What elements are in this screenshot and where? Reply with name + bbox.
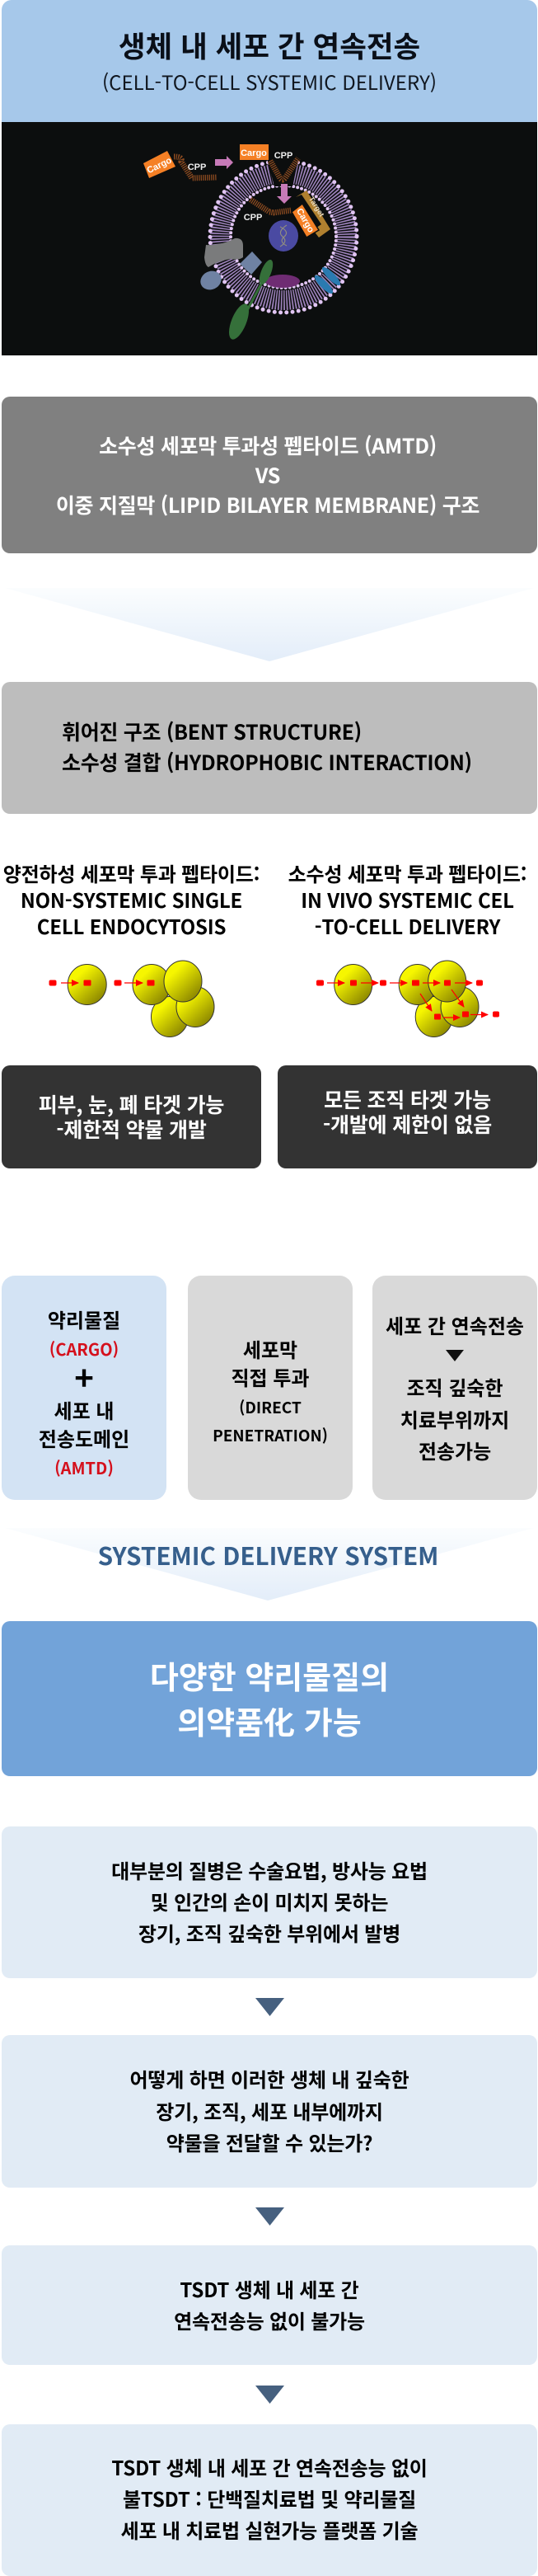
panel text <box>62 717 472 777</box>
title: 생체 내 세포 간 연속전송 <box>119 24 420 66</box>
box text <box>39 1089 224 1144</box>
card text: PENETRATION) <box>213 1424 328 1446</box>
icon: triangle down <box>446 1350 464 1361</box>
heading: right column: IN VIVO SYSTEMIC CEL <box>301 885 514 914</box>
box text <box>111 1855 428 1947</box>
heading: left column: 양전하성 세포막 투과 펩타이드: <box>3 858 260 887</box>
box text <box>111 2452 428 2544</box>
box text: 연속전송능 없이 불가능 <box>174 2306 365 2334</box>
card text: 세포 내 <box>54 1395 114 1424</box>
heading: right column <box>288 858 526 940</box>
panel text: VS <box>255 460 280 490</box>
box text: 장기, 조직, 세포 내부에까지 <box>156 2096 383 2124</box>
panel text: 의약품化 가능 <box>177 1698 362 1743</box>
panel text: 소수성 결합 (HYDROPHOBIC INTERACTION) <box>62 747 472 777</box>
card text <box>213 1334 328 1446</box>
panel: AMTD vs lipid bilayer <box>2 397 537 553</box>
target with cargo inside the cell <box>244 190 330 237</box>
box text: 약물을 전달할 수 있는가? <box>166 2127 372 2156</box>
box text: 장기, 조직 깊숙한 부위에서 발병 <box>138 1918 400 1947</box>
card text <box>39 1304 129 1479</box>
arrow: flow 1 <box>255 1998 284 2016</box>
panel text: 이중 지질막 (LIPID BILAYER MEMBRANE) 구조 <box>56 490 480 519</box>
card heading: 세포 간 연속전송 <box>386 1310 524 1339</box>
card text: 전송도메인 <box>39 1423 129 1452</box>
box text: 대부분의 질병은 수술요법, 방사능 요법 <box>111 1855 428 1884</box>
flow box 2 <box>2 2035 537 2188</box>
card: direct penetration <box>188 1276 353 1500</box>
box text: 세포 내 치료법 실현가능 플랫폼 기술 <box>121 2515 418 2544</box>
arrow: flow 3 <box>255 2386 284 2404</box>
box text: 모든 조직 타겟 가능 <box>324 1084 491 1114</box>
card text: (DIRECT <box>239 1396 302 1418</box>
label: systemic delivery system: SYSTEMIC DELIVERY SYSTEM <box>98 1537 438 1572</box>
card text: 세포막 <box>243 1334 297 1363</box>
panel text: 휘어진 구조 (BENT STRUCTURE) <box>62 717 362 746</box>
card: cargo + AMTD <box>2 1276 166 1500</box>
target with cargo inside the cell: Target <box>307 195 326 219</box>
box text <box>323 1084 492 1139</box>
heading: right column: -TO-CELL DELIVERY <box>315 911 500 940</box>
cargo with CPP outside the cell: CPP <box>188 162 206 172</box>
panel: drug development <box>2 1621 537 1776</box>
box text: 및 인간의 손이 미치지 못하는 <box>151 1887 388 1916</box>
card text: (CARGO) <box>49 1337 119 1361</box>
nucleus with DNA <box>269 220 298 251</box>
arrow: pink down <box>277 184 292 204</box>
box text: TSDT 생체 내 세포 간 <box>180 2274 359 2303</box>
diagram: systemic cells <box>316 960 499 1037</box>
card text: 조직 깊숙한 <box>406 1372 503 1401</box>
diagram: non-systemic cells <box>49 960 214 1037</box>
box text: TSDT 생체 내 세포 간 연속전송능 없이 <box>111 2452 428 2481</box>
arrow: gradient down <box>54 600 486 661</box>
panel text: 다양한 약리물질의 <box>150 1652 389 1698</box>
heading: left column: CELL ENDOCYTOSIS <box>37 911 226 940</box>
cargo with CPP outside the cell <box>143 151 217 178</box>
box text: -제한적 약물 개발 <box>56 1114 207 1144</box>
cargo with CPP outside the cell: Cargo <box>146 155 174 176</box>
heading: left column <box>3 858 260 940</box>
dark box: right <box>278 1065 537 1168</box>
heading: left column: NON-SYSTEMIC SINGLE <box>21 885 242 914</box>
dark box: left <box>2 1065 261 1168</box>
target with cargo inside the cell: Cargo <box>294 207 316 235</box>
box text: 불TSDT : 단백질치료법 및 약리물질 <box>123 2484 416 2513</box>
flow box 1 <box>2 1826 537 1978</box>
card text: + <box>74 1352 94 1400</box>
card text <box>400 1372 509 1464</box>
panel text: 소수성 세포막 투과성 펩타이드 (AMTD) <box>99 430 437 460</box>
card text: 전송가능 <box>419 1436 491 1464</box>
card text: 치료부위까지 <box>400 1403 509 1433</box>
target with cargo inside the cell: CPP <box>244 213 262 223</box>
header panel <box>2 0 537 122</box>
lipid bilayer membrane <box>210 153 357 313</box>
panel text <box>56 430 480 519</box>
panel text <box>150 1652 389 1743</box>
flow box 3 <box>2 2245 537 2365</box>
box text <box>130 2064 409 2156</box>
card text: (AMTD) <box>54 1455 114 1479</box>
card: cell-to-cell <box>372 1276 537 1500</box>
card text: 약리물질 <box>48 1304 120 1333</box>
box text: 어떻게 하면 이러한 생체 내 깊숙한 <box>130 2064 409 2093</box>
box text: 피부, 눈, 폐 타겟 가능 <box>39 1089 224 1119</box>
arrow: pink right <box>215 156 233 169</box>
box text: -개발에 제한이 없음 <box>323 1109 492 1139</box>
panel: bent structure <box>2 682 537 814</box>
box text <box>174 2274 365 2334</box>
arrow: flow 2 <box>255 2207 284 2226</box>
arrow: gradient down <box>53 1540 486 1601</box>
subtitle: (CELL-TO-CELL SYSTEMIC DELIVERY) <box>102 67 437 96</box>
cargo with CPP entering the membrane: CPP <box>274 151 292 161</box>
cargo with CPP entering the membrane <box>240 144 298 180</box>
flow box 4 <box>2 2424 537 2576</box>
cargo with CPP entering the membrane: Cargo <box>241 148 267 158</box>
card text: 직접 투과 <box>231 1362 310 1391</box>
heading: right column: 소수성 세포막 투과 펩타이드: <box>288 858 526 887</box>
membrane proteins <box>198 238 343 342</box>
image panel: cell membrane diagram <box>2 122 537 355</box>
